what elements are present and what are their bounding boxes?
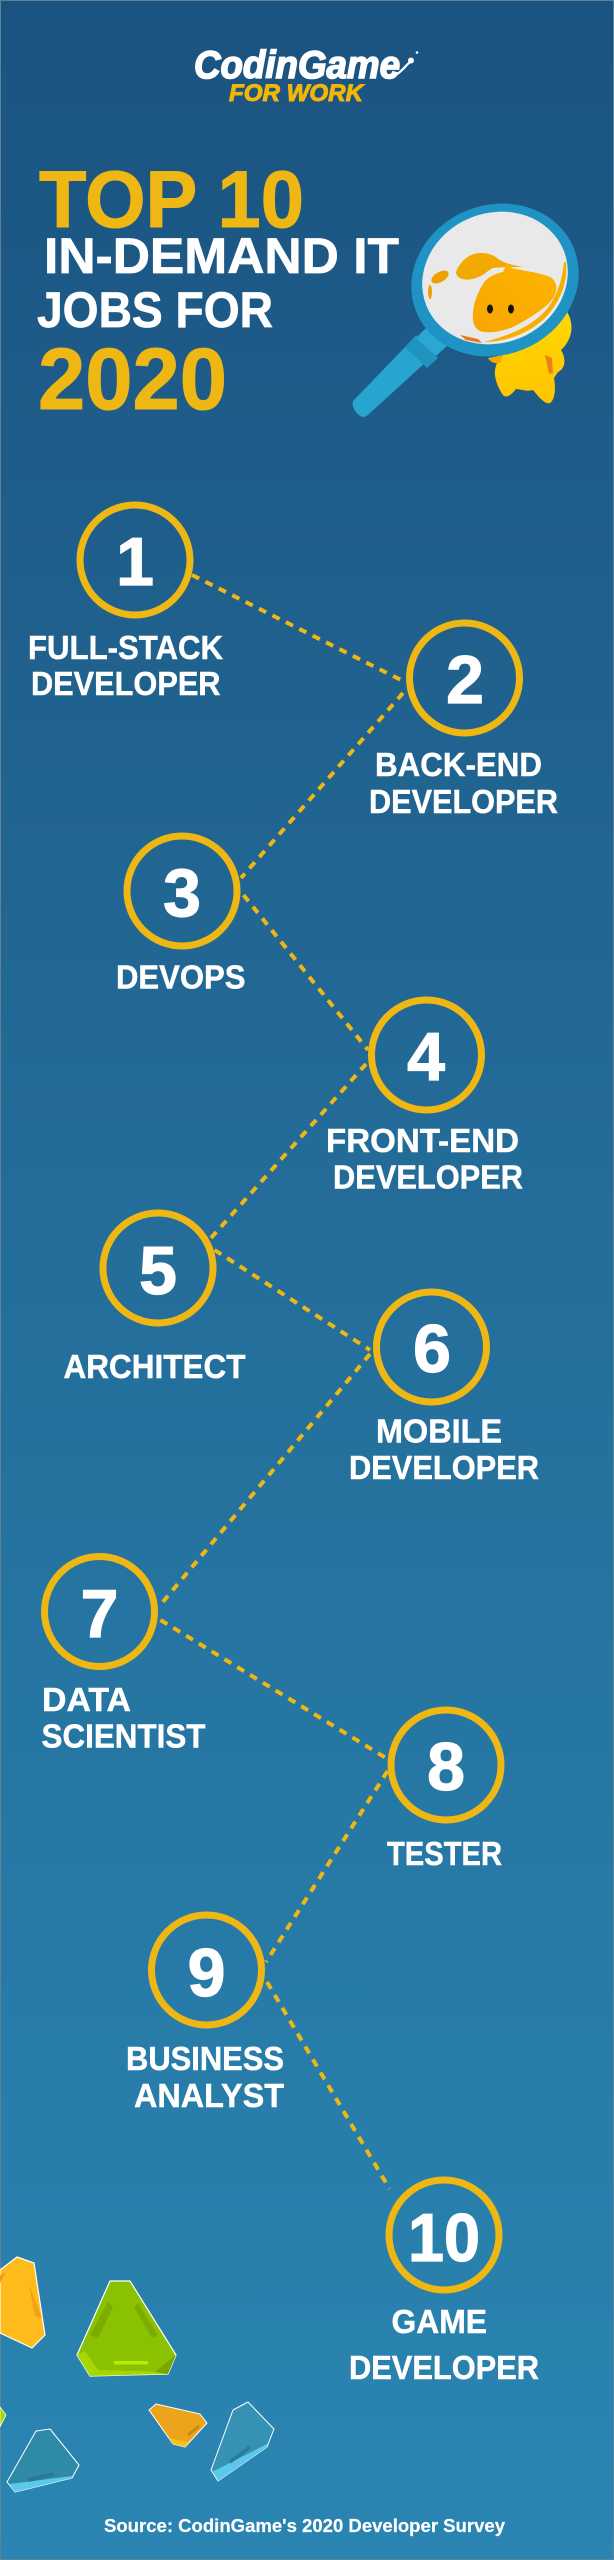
job 3: devops: 3 [163,855,201,931]
job 2: back-end developer: 2 [446,642,484,718]
connector: 2 to 3 [241,693,403,878]
job 5: architect [64,1213,246,1385]
lens reflection [428,253,566,343]
title: JOBS FOR [37,282,273,338]
job 7: data scientist: DATA [42,1681,131,1718]
job 4: front-end developer: FRONT-END [326,1122,519,1159]
title: IN-DEMAND IT [44,228,399,284]
connector: 6 to 7 [159,1354,370,1607]
job 9: business analyst [126,1915,284,2114]
connector: 4 to 5 [211,1064,366,1238]
job 9: business analyst: BUSINESS [126,2040,284,2077]
job 8: tester [387,1710,502,1872]
job 2: back-end developer [369,623,558,820]
job 1: full-stack developer: FULL-STACK [28,629,223,666]
job 10: game developer: 10 [408,2200,480,2276]
job 4: front-end developer: 4 [407,1019,445,1095]
job 10: game developer: GAME [392,2303,487,2340]
job 9: business analyst: ANALYST [134,2077,284,2114]
job 1: full-stack developer [28,505,223,702]
gem: yellow [0,2257,45,2348]
job 10: game developer: DEVELOPER [349,2349,539,2386]
mascot arm and backpack accent [488,355,503,363]
connector: 8 to 9 [266,1771,388,1962]
job 3: devops: DEVOPS [116,958,246,996]
logo: CodinGame for Work: FOR WORK [229,80,365,107]
job 6: mobile developer: 6 [413,1311,451,1387]
job 5: architect: ARCHITECT [64,1348,246,1385]
job 1: full-stack developer: 1 [116,524,154,600]
source note: Source: CodinGame's 2020 Developer Survey [104,2515,506,2536]
title [37,155,399,428]
gem: small green at edge [0,2407,6,2427]
gem: green [77,2281,176,2376]
job 7: data scientist: SCIENTIST [42,1718,206,1754]
job 7: data scientist [42,1556,206,1754]
gem: blue left [7,2429,79,2492]
job 2: back-end developer: BACK-END [375,746,542,783]
illustration: mascot with magnifying glass [353,179,602,417]
magnifier rim [388,179,602,381]
gem: orange [149,2404,207,2447]
job 7: data scientist: 7 [81,1576,118,1652]
job 6: mobile developer: DEVELOPER [349,1449,539,1486]
connector: 3 to 4 [244,895,368,1050]
connector: 9 to 10 [267,1982,390,2189]
title: TOP 10 [39,155,304,245]
job 4: front-end developer: DEVELOPER [333,1158,523,1196]
job 1: full-stack developer: DEVELOPER [31,665,221,702]
connector: 7 to 8 [160,1620,388,1759]
job 10: game developer [349,2180,539,2386]
job 6: mobile developer: MOBILE [376,1412,502,1450]
logo: CodinGame for Work [194,44,418,107]
magnifier handle [353,325,447,417]
job 2: back-end developer: DEVELOPER [369,783,558,820]
title: 2020 [38,331,227,428]
job 4: front-end developer [326,1000,523,1196]
mascot body [495,310,571,403]
logo: CodinGame for Work: CodinGame [194,44,400,87]
job 9: business analyst: 9 [188,1935,225,2011]
gem: blue right [211,2402,274,2481]
job 8: tester: 8 [427,1729,465,1805]
job 5: architect: 5 [139,1233,177,1309]
job 6: mobile developer [349,1292,539,1486]
job 8: tester: TESTER [387,1835,502,1872]
connector: 1 to 2 [192,575,405,682]
connector: 5 to 6 [214,1250,370,1350]
job 3: devops [116,836,246,996]
